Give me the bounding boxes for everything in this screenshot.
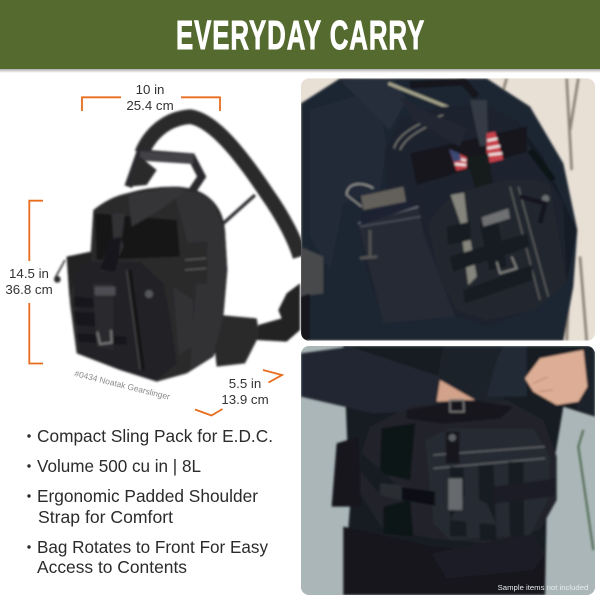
- photo: bag worn on back: [300, 77, 600, 343]
- D-ring: [97, 330, 112, 344]
- shoulder strap: [343, 79, 404, 128]
- header banner: [0, 0, 600, 73]
- arm strap at left: [300, 247, 323, 297]
- flashlight: [451, 193, 477, 285]
- shoulder strap: [142, 117, 300, 257]
- molle webbing: [447, 222, 533, 303]
- forearm skin: [437, 380, 475, 402]
- dimension: depth: 5.5 in: [229, 376, 261, 391]
- front pocket: [430, 431, 532, 536]
- feature list: Compact Sling Pack for E.D.C.: [37, 426, 273, 446]
- photo: bag rotated to front: [300, 343, 600, 600]
- feature list: Access to Contents: [37, 557, 187, 577]
- front pocket: [475, 183, 493, 194]
- water bottle: [360, 206, 415, 225]
- feature list: Bag Rotates to Front For Easy: [37, 537, 268, 557]
- pouch flap: [383, 500, 413, 537]
- caption: sample items: Sample items not included: [498, 583, 588, 592]
- brand tag: [448, 478, 462, 510]
- lower strap and belt: [257, 283, 300, 342]
- snap: [145, 290, 153, 298]
- wearer torso: [343, 346, 595, 595]
- right sleeve: [580, 349, 595, 414]
- feature list: Ergonomic Padded Shoulder: [37, 486, 258, 506]
- side pouch: [67, 253, 92, 297]
- D-ring: [497, 257, 517, 273]
- buckle: [470, 152, 492, 187]
- vertical strap: [173, 287, 193, 355]
- top handle: [128, 153, 202, 192]
- brand tag: [95, 287, 115, 295]
- dimension: depth: 13.9 cm: [221, 392, 269, 407]
- dimension: height: 14.5 in: [9, 266, 49, 281]
- molle webbing: [450, 462, 524, 540]
- snap tab: [446, 432, 459, 463]
- snap: [542, 195, 549, 202]
- dimension: height: [5, 201, 53, 364]
- feature list: Strap for Comfort: [38, 507, 173, 527]
- dimension: height: 36.8 cm: [5, 282, 53, 297]
- dimension: depth: [195, 370, 282, 416]
- model caption: #0434 Noatak Gearslinger: [74, 368, 171, 402]
- buckle: [100, 213, 125, 272]
- brand tag: [482, 208, 510, 227]
- velcro panel: [380, 423, 415, 480]
- title: EVERYDAY CARRY: [176, 13, 424, 59]
- bag body: [67, 187, 227, 382]
- front pocket: [73, 262, 177, 380]
- velcro panel: [95, 213, 180, 260]
- green cable: [578, 430, 593, 550]
- flag patch: [449, 132, 503, 171]
- molle webbing: [74, 297, 127, 345]
- velcro panel: [411, 127, 527, 185]
- feature list: Volume 500 cu in | 8L: [37, 456, 201, 476]
- dimension: width: [82, 82, 220, 113]
- buckle: [380, 484, 433, 504]
- wearer shirt: [301, 78, 577, 341]
- product photo: sling bag: [54, 117, 300, 382]
- dimension: width: 25.4 cm: [126, 98, 174, 113]
- side pouch: [330, 439, 352, 508]
- bag body: [442, 104, 550, 180]
- strap: [407, 400, 513, 423]
- hand: [525, 350, 587, 405]
- feature list: [27, 426, 273, 577]
- bag body: [360, 400, 557, 543]
- background twigs: [503, 78, 587, 341]
- handle: [410, 82, 477, 97]
- dimension: width: 10 in: [136, 82, 164, 97]
- shoulder strap: [487, 346, 527, 397]
- water bottle pouch: [358, 206, 455, 323]
- left arm sleeve: [301, 347, 440, 413]
